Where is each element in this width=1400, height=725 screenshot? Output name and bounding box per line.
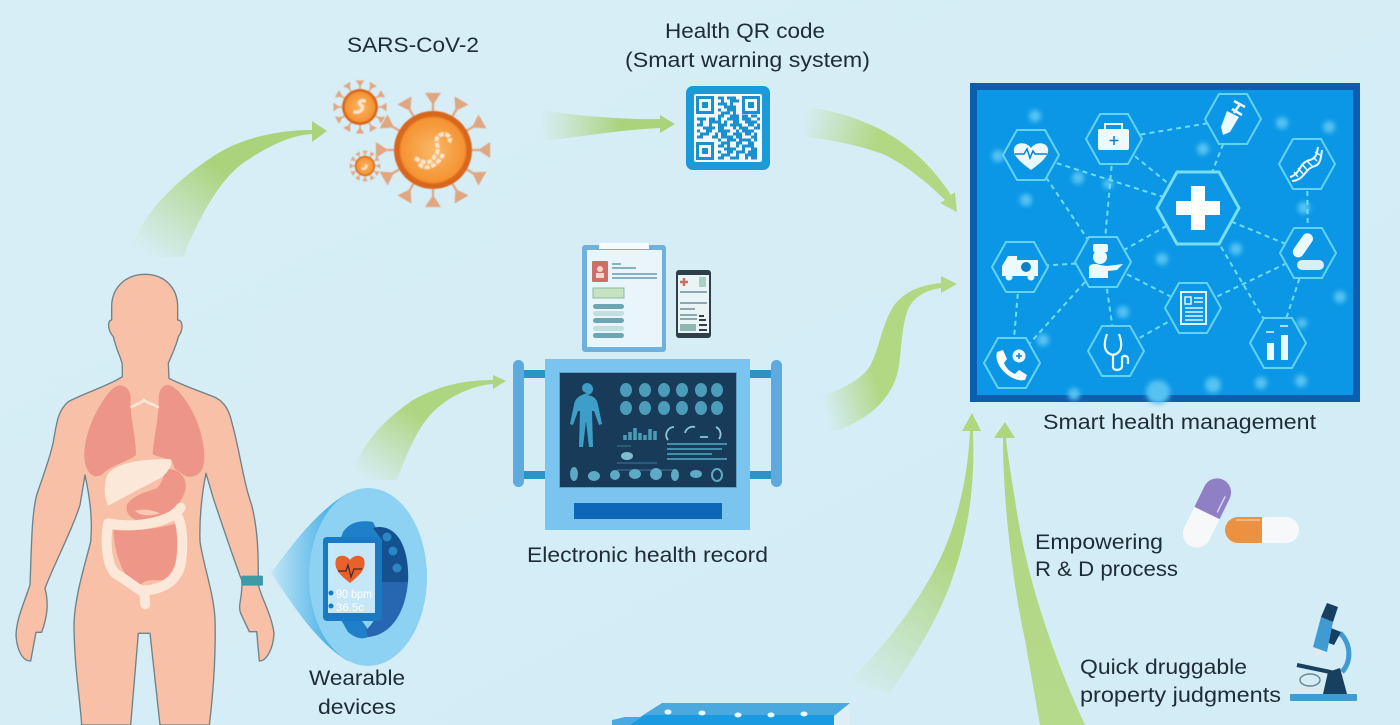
label: empowering R and D process bbox=[1035, 531, 1178, 581]
label: wearable devices bbox=[309, 667, 405, 719]
label: quick druggable property judgments: property judgments bbox=[1080, 684, 1281, 707]
wristband bbox=[241, 576, 263, 586]
arrow: SARS-CoV-2 to health QR code bbox=[540, 110, 675, 141]
medium virus bbox=[334, 81, 386, 133]
label: wearable devices: devices bbox=[318, 696, 396, 719]
large intestine bbox=[107, 508, 182, 604]
hexagon: phone bbox=[984, 338, 1040, 388]
monitor screen bbox=[559, 372, 737, 488]
label: health QR code: (Smart warning system) bbox=[625, 49, 870, 72]
label: wearable devices: Wearable bbox=[309, 667, 405, 690]
figure: human body with organs bbox=[16, 274, 274, 725]
icon: wearable smartwatch callout bbox=[271, 488, 427, 666]
icon: microscope bbox=[1290, 603, 1357, 701]
icon: paper health record clipboard bbox=[582, 243, 666, 352]
label: SARS-CoV-2: SARS-CoV-2 bbox=[347, 34, 479, 57]
lungs bbox=[84, 385, 136, 476]
label: electronic health record: Electronic health record bbox=[527, 544, 768, 567]
purple capsule bbox=[1178, 474, 1236, 552]
label: empowering R and D process: Empowering bbox=[1035, 531, 1163, 554]
large virus bbox=[377, 94, 489, 206]
icon: wearable smartwatch callout: 90 bpm bbox=[336, 587, 372, 601]
label: quick druggable property judgments bbox=[1080, 656, 1281, 707]
label: empowering R and D process: R & D process bbox=[1035, 558, 1178, 581]
icon: QR code bbox=[686, 86, 770, 170]
icon: medical monitor bbox=[513, 359, 782, 530]
monitor handles bbox=[513, 360, 524, 487]
label: health QR code bbox=[625, 20, 870, 72]
arrow: electronic health record to smart health management bbox=[820, 276, 957, 434]
arrow: bottom device to smart health management bbox=[847, 413, 981, 693]
monitor body bbox=[545, 359, 750, 530]
callout cone bbox=[271, 493, 348, 661]
arrow: body to SARS-CoV-2 bbox=[128, 121, 327, 257]
hexagon: stethoscope bbox=[1088, 326, 1144, 376]
watch face bbox=[323, 537, 382, 621]
hexagon: syringe bbox=[1205, 94, 1261, 144]
label: quick druggable property judgments: Quick druggable bbox=[1080, 656, 1247, 679]
arrow: R and D to smart health management bbox=[994, 422, 1085, 725]
hexagon: capsules bbox=[1280, 228, 1336, 278]
arrow: wearable devices to electronic health record bbox=[350, 375, 506, 480]
background bokeh dots bbox=[992, 110, 1346, 404]
hexagon: medical cross bbox=[1157, 172, 1239, 244]
label: health QR code: Health QR code bbox=[665, 20, 825, 43]
panel: smart health management bbox=[970, 83, 1360, 404]
hexagon: ambulance bbox=[992, 242, 1048, 292]
hexagon: medical kit bbox=[1086, 114, 1142, 164]
icon: smartphone record bbox=[676, 270, 711, 338]
label: smart health management: Smart health management bbox=[1043, 411, 1316, 434]
watch band bbox=[340, 521, 382, 540]
liver bbox=[105, 459, 171, 506]
hexagon: DNA bbox=[1279, 139, 1335, 189]
small virus bbox=[350, 151, 380, 181]
icon: bottom device, cropped bbox=[612, 703, 850, 725]
arrow: QR code to smart health management bbox=[800, 107, 957, 212]
hexagon: medical record bbox=[1165, 283, 1221, 333]
orange capsule bbox=[1225, 517, 1299, 543]
body silhouette bbox=[16, 274, 274, 725]
hexagon: heart rate bbox=[1003, 130, 1059, 180]
hexagon: bar chart bbox=[1250, 318, 1306, 368]
icon: coronavirus particles bbox=[334, 81, 489, 206]
trachea bbox=[131, 400, 159, 408]
network links bbox=[1012, 119, 1308, 363]
icon: wearable smartwatch callout: 36.5c bbox=[336, 602, 365, 614]
icon: drug capsules bbox=[1178, 474, 1299, 552]
hexagon: nurse bbox=[1075, 237, 1131, 287]
stomach bbox=[126, 469, 186, 522]
small intestine bbox=[113, 523, 177, 588]
